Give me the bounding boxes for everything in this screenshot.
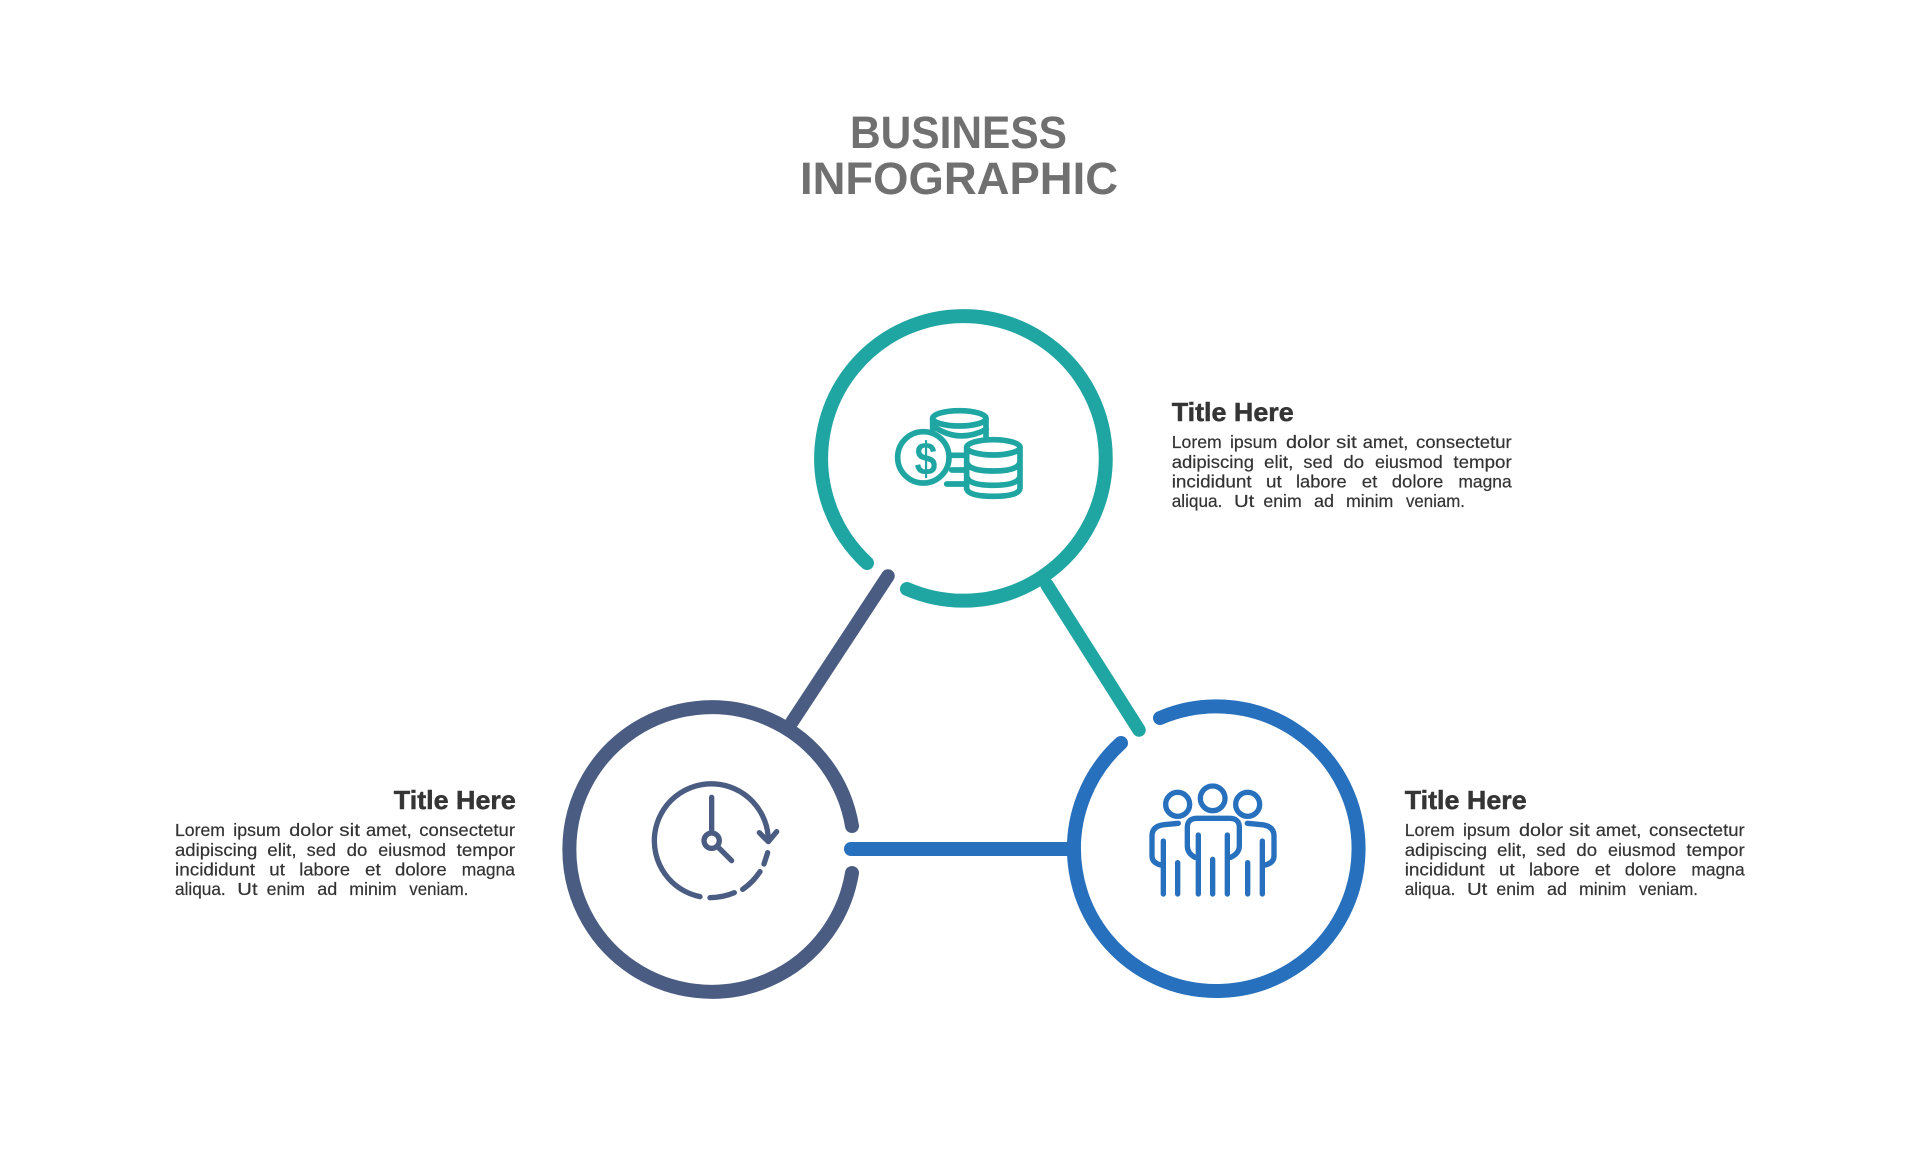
body text: dolor — [289, 820, 333, 840]
ring: blue right circle — [1074, 706, 1359, 991]
body text: tempor — [1686, 840, 1745, 860]
body text: dolor — [1519, 820, 1563, 840]
body text: sit — [1336, 432, 1357, 452]
connector: blue line — [851, 842, 1069, 856]
body text: Ut — [1234, 491, 1254, 511]
body text: sit — [339, 820, 360, 840]
text block: left — [175, 785, 520, 899]
body text: incididunt — [1172, 472, 1252, 492]
body text: ut — [1499, 860, 1515, 880]
body text: Ut — [1467, 879, 1487, 899]
body text: eiusmod — [378, 840, 446, 860]
body text: minim — [349, 879, 397, 899]
body text: amet, — [366, 820, 412, 840]
title: INFOGRAPHIC — [800, 153, 1118, 204]
ring: navy left circle — [569, 707, 852, 992]
body text: incididunt — [1405, 860, 1485, 880]
body text: aliqua. — [1172, 491, 1222, 511]
body text: Lorem — [1172, 432, 1222, 452]
body text: enim — [267, 879, 305, 899]
heading: Title Here — [1172, 397, 1294, 427]
body text: consectetur — [1649, 820, 1745, 840]
body text: sed — [307, 840, 336, 860]
body text: magna — [1691, 860, 1745, 880]
body text: enim — [1496, 879, 1535, 899]
body text: veniam. — [1406, 491, 1465, 511]
body text: consectetur — [419, 820, 515, 840]
body text: eiusmod — [1608, 840, 1676, 860]
heading: Title Here — [394, 785, 516, 815]
body text: dolore — [1625, 860, 1676, 880]
body text: incididunt — [175, 860, 255, 880]
body text: labore — [1296, 472, 1347, 492]
body text: labore — [1529, 860, 1580, 880]
body text: do — [1343, 452, 1364, 472]
body text: et — [1595, 860, 1611, 880]
body text: minim — [1346, 491, 1393, 511]
body text: ad — [1547, 879, 1567, 899]
body text: eiusmod — [1375, 452, 1443, 472]
body text: veniam. — [409, 879, 468, 899]
body text: tempor — [457, 840, 515, 860]
body text: adipiscing — [175, 840, 257, 860]
body text: ipsum — [233, 820, 281, 840]
body text: consectetur — [1416, 432, 1512, 452]
icon: clock — [654, 784, 777, 898]
heading: Title Here — [1405, 785, 1527, 815]
body text: Ut — [237, 879, 258, 899]
body text: Lorem — [175, 820, 225, 840]
body text: adipiscing — [1172, 452, 1254, 472]
body text: magna — [1458, 472, 1512, 492]
body text: elit, — [267, 840, 297, 860]
body text: sed — [1303, 452, 1333, 472]
title — [800, 107, 1118, 204]
body text: dolore — [1392, 472, 1443, 492]
body text: do — [347, 840, 367, 860]
icon: team of people — [1152, 786, 1274, 894]
body text: veniam. — [1639, 879, 1698, 899]
body text: amet, — [1363, 432, 1408, 452]
body text: tempor — [1453, 452, 1512, 472]
text block: top right — [1172, 397, 1517, 511]
body text: aliqua. — [1405, 879, 1455, 899]
body text: ut — [1266, 472, 1282, 492]
body text: magna — [462, 860, 515, 880]
body text: ipsum — [1463, 820, 1510, 840]
body text: labore — [299, 860, 350, 880]
body text: Lorem — [1405, 820, 1455, 840]
body text: sed — [1536, 840, 1566, 860]
body text: et — [1362, 472, 1378, 492]
body text: adipiscing — [1405, 840, 1487, 860]
title: BUSINESS — [850, 107, 1067, 158]
body text: aliqua. — [175, 879, 226, 899]
body text: et — [365, 860, 381, 880]
text block: right — [1405, 785, 1750, 899]
body text: ipsum — [1230, 432, 1277, 452]
body text: ad — [1314, 491, 1334, 511]
body text: enim — [1263, 491, 1302, 511]
body text: minim — [1579, 879, 1626, 899]
connector: navy line — [792, 576, 888, 722]
ring: teal top circle — [821, 316, 1106, 601]
body text: dolore — [395, 860, 447, 880]
body text: ut — [269, 860, 285, 880]
body text: sit — [1569, 820, 1590, 840]
body text: elit, — [1264, 452, 1293, 472]
icon: coins: $ — [915, 432, 937, 484]
icon: coins — [898, 411, 1020, 496]
body text: do — [1576, 840, 1597, 860]
connector: teal line — [1047, 585, 1139, 730]
body text: ad — [317, 879, 337, 899]
body text: amet, — [1596, 820, 1641, 840]
body text: elit, — [1497, 840, 1526, 860]
body text: dolor — [1286, 432, 1330, 452]
